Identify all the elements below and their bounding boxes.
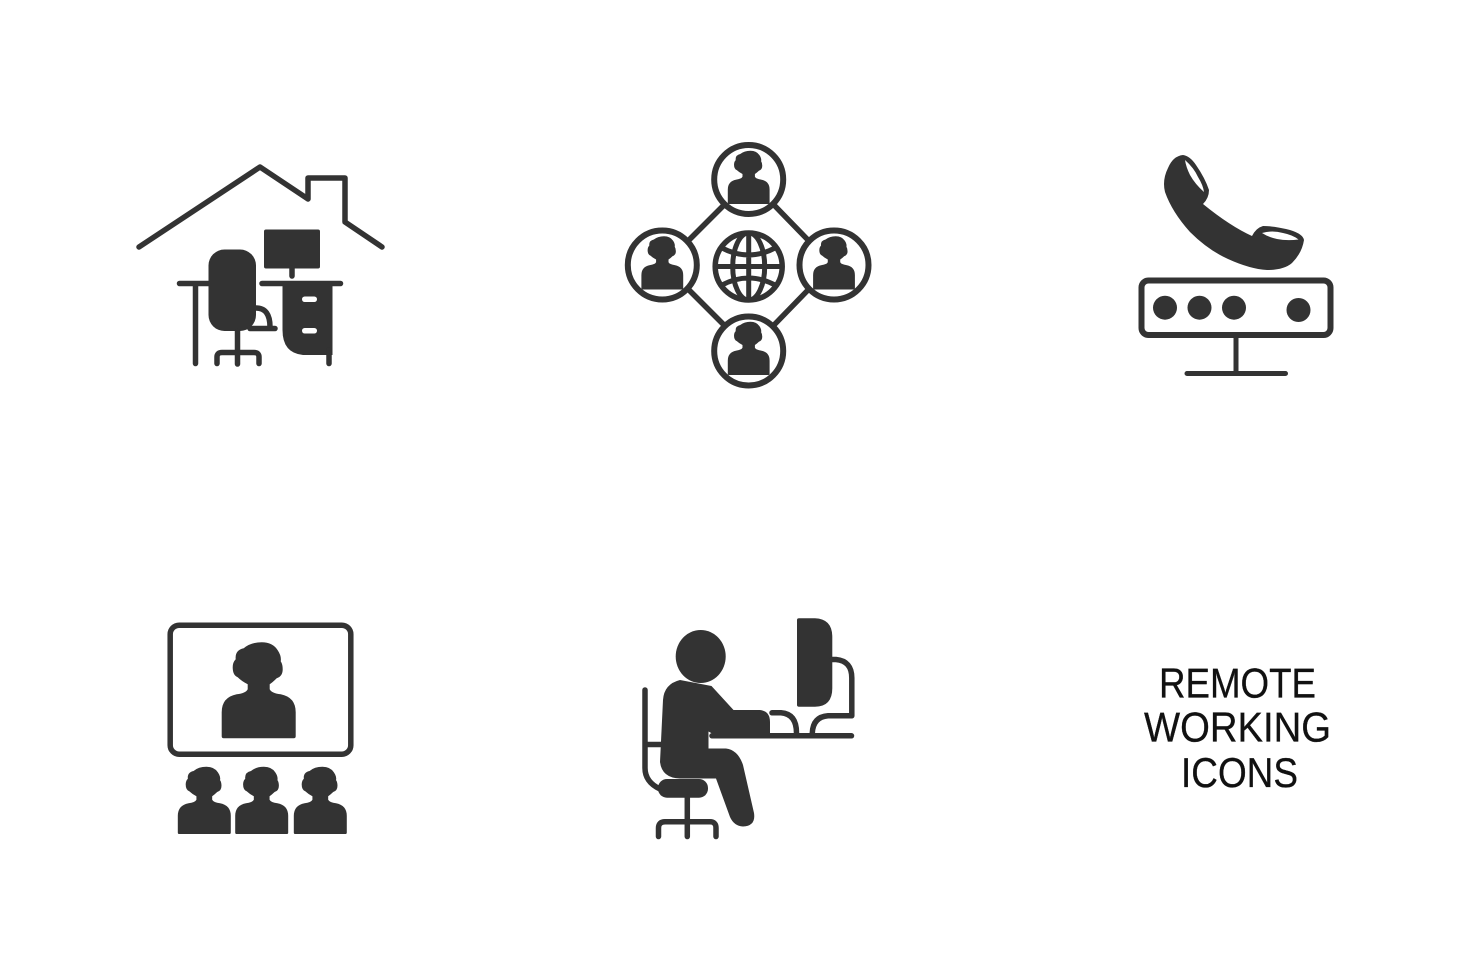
desk drawers — [282, 283, 332, 364]
telephone handset — [1164, 155, 1304, 270]
office chair — [208, 250, 275, 364]
person node: left — [628, 230, 697, 300]
router stand — [1187, 337, 1286, 374]
desk — [712, 733, 852, 739]
icon: person working at computer — [645, 618, 852, 836]
monitor stand — [812, 660, 852, 733]
caption: remote working icons — [1144, 660, 1331, 796]
router lights — [1153, 296, 1310, 322]
chair — [645, 690, 716, 836]
person node: right — [800, 230, 868, 300]
icon: video conference — [170, 625, 351, 834]
audience — [178, 767, 347, 834]
connecting lines — [689, 205, 808, 325]
caption line 3: ICONS — [1181, 749, 1298, 796]
desktop monitor — [264, 230, 320, 276]
desk top and left leg — [180, 284, 340, 364]
person node: bottom — [714, 316, 783, 386]
person head — [676, 630, 726, 683]
presenter on screen — [222, 642, 296, 738]
person node: top — [714, 145, 783, 214]
caption line 2: WORKING — [1144, 704, 1331, 750]
house roof outline — [139, 167, 382, 247]
icon: telephone and router — [1142, 155, 1330, 374]
icon: global team network — [628, 145, 868, 386]
screen frame — [170, 625, 351, 754]
globe — [715, 233, 782, 300]
monitor screen — [797, 618, 832, 707]
router box — [1142, 280, 1330, 335]
person body — [660, 680, 770, 826]
keyboard — [772, 713, 796, 733]
caption line 1: REMOTE — [1159, 660, 1316, 706]
icon: home office — [139, 167, 382, 364]
